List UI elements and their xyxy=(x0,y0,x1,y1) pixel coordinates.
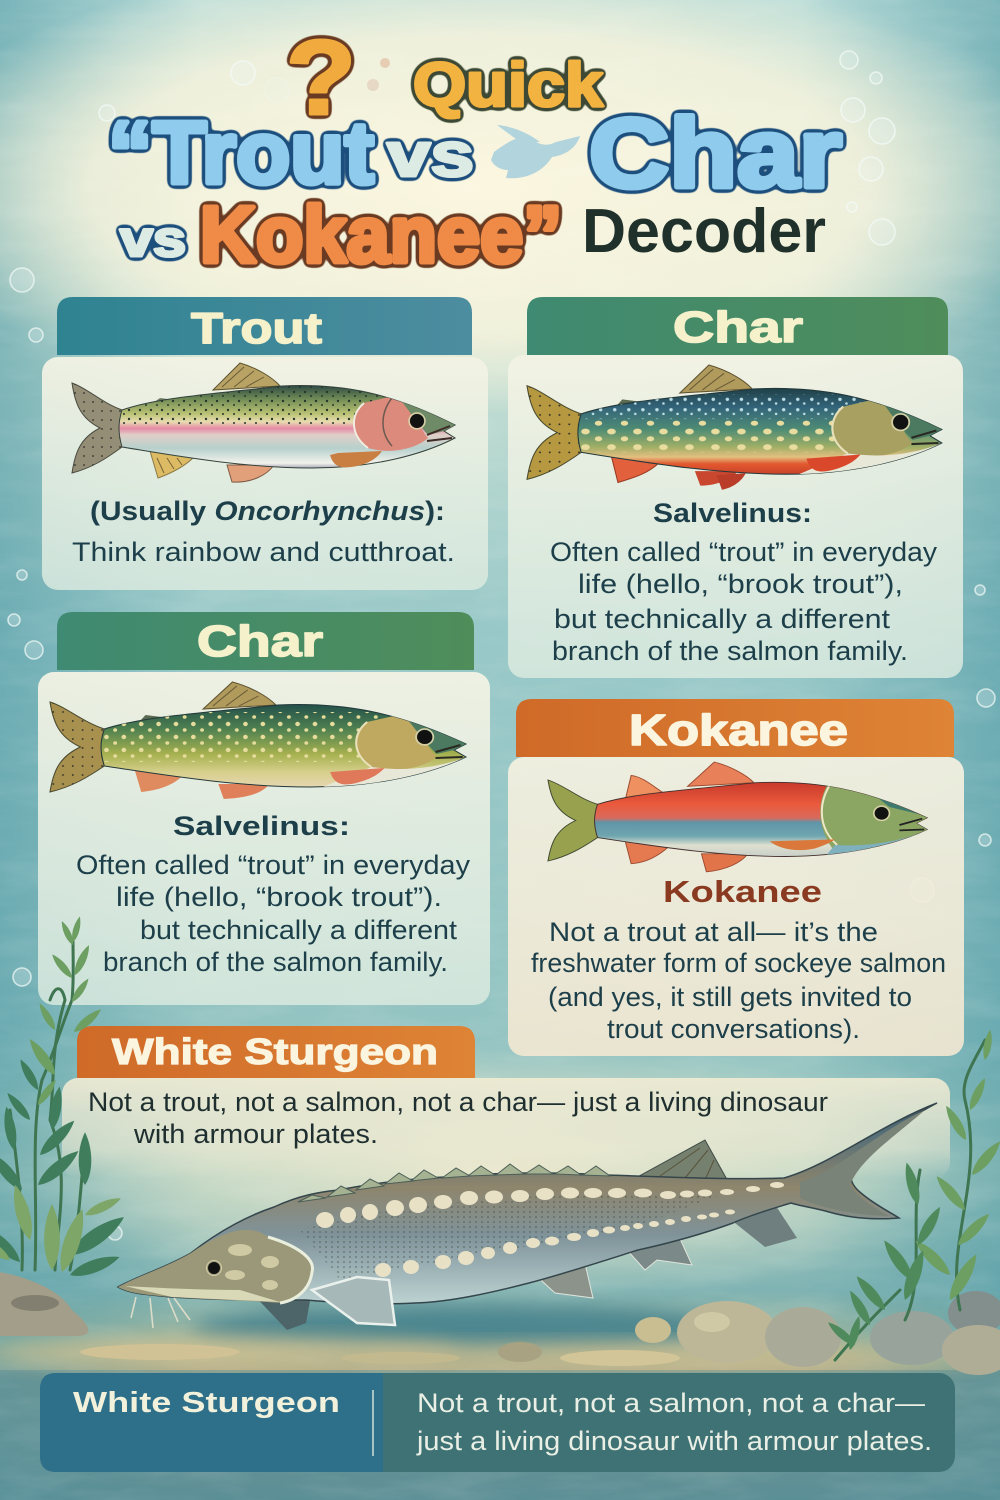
sturgeon description xyxy=(88,1087,828,1149)
panel: white sturgeon xyxy=(62,1026,950,1178)
kokanee pectoral fin xyxy=(770,839,835,850)
char right description: branch of the salmon family. xyxy=(552,636,908,666)
kokanee description: trout conversations). xyxy=(607,1014,860,1044)
title word: Kokanee: Kokanee” xyxy=(200,190,562,279)
char left description xyxy=(76,850,471,977)
title word: second vs: vs xyxy=(120,211,186,267)
char left description: but technically a different xyxy=(140,915,458,945)
panel: char right xyxy=(508,297,963,678)
kokanee header xyxy=(516,699,954,757)
trout genus line: (Usually Oncorhynchus ): xyxy=(90,496,445,526)
char left description: life (hello, “brook trout”). xyxy=(116,882,442,912)
kokanee description: Not a trout at all— it’s the xyxy=(549,917,878,947)
bar label: White Sturgeon xyxy=(73,1387,340,1419)
body xyxy=(118,1103,937,1304)
panel: char left xyxy=(38,612,490,1005)
trout header xyxy=(57,297,472,355)
trout fish xyxy=(72,363,455,482)
panel: trout xyxy=(42,297,488,590)
title word: Char: Char xyxy=(589,98,842,208)
sturgeon description: with armour plates. xyxy=(133,1119,378,1149)
upper plates xyxy=(316,1182,784,1228)
title word: Trout: “Trout xyxy=(108,103,374,202)
fins xyxy=(632,1140,730,1185)
body scale texture xyxy=(300,1194,720,1280)
char right description: Often called “trout” in everyday xyxy=(550,537,938,567)
sturgeon header xyxy=(77,1026,475,1078)
seaweed right xyxy=(825,1029,1000,1360)
kokanee header: Kokanee xyxy=(629,706,848,755)
tail shade xyxy=(800,1110,925,1216)
char pectoral fin xyxy=(330,768,384,784)
char header left: Char xyxy=(197,617,323,666)
icon: question mark: ? xyxy=(286,19,356,137)
pectoral fin xyxy=(312,1277,395,1325)
sturgeon fish xyxy=(118,1103,937,1330)
kokanee description xyxy=(531,917,946,1044)
char header right: Char xyxy=(673,303,803,352)
char header left xyxy=(57,612,474,670)
trout description: Think rainbow and cutthroat. xyxy=(72,537,455,567)
bubbles xyxy=(8,51,995,1240)
sturgeon description: Not a trout, not a salmon, not a char— just a living dinosaur xyxy=(88,1087,828,1117)
char pectoral fin xyxy=(806,454,861,472)
char left description: branch of the salmon family. xyxy=(103,947,448,977)
char right description: life (hello, “brook trout”), xyxy=(578,569,903,599)
trout header: Trout xyxy=(191,304,322,353)
char right description: but technically a different xyxy=(554,604,891,634)
title xyxy=(108,19,842,279)
char left description: Often called “trout” in everyday xyxy=(76,850,471,880)
title word: vs: vs xyxy=(387,121,474,190)
head xyxy=(118,1230,312,1303)
char fish left xyxy=(50,682,466,799)
icon: fish silhouette xyxy=(491,125,580,178)
kokanee fish xyxy=(548,762,934,872)
panel: kokanee xyxy=(508,699,964,1056)
title word: Quick: Quick xyxy=(413,51,604,120)
bar description: just a living dinosaur with armour plates. xyxy=(416,1426,932,1456)
bottom summary bar xyxy=(40,1373,955,1472)
bar description xyxy=(416,1388,932,1456)
sturgeon header: White Sturgeon xyxy=(112,1031,438,1072)
char left genus: Salvelinus: xyxy=(173,811,350,841)
char right genus: Salvelinus: xyxy=(653,498,812,528)
seaweed left xyxy=(0,916,129,1281)
char right description xyxy=(550,537,938,666)
trout pectoral fin xyxy=(330,451,382,467)
char fish right xyxy=(527,365,942,490)
dorsal scutes xyxy=(298,1164,610,1202)
barbels xyxy=(131,1297,190,1328)
kokanee subheading: Kokanee xyxy=(663,874,822,909)
title word: Decoder: Decoder xyxy=(582,197,826,266)
bar description: Not a trout, not a salmon, not a char— xyxy=(417,1388,925,1418)
kokanee description: freshwater form of sockeye salmon xyxy=(531,948,946,978)
rocks and seabed xyxy=(0,1272,1000,1375)
lower plates xyxy=(375,1210,735,1277)
char header right xyxy=(527,297,948,355)
kokanee description: (and yes, it still gets invited to xyxy=(548,982,912,1012)
